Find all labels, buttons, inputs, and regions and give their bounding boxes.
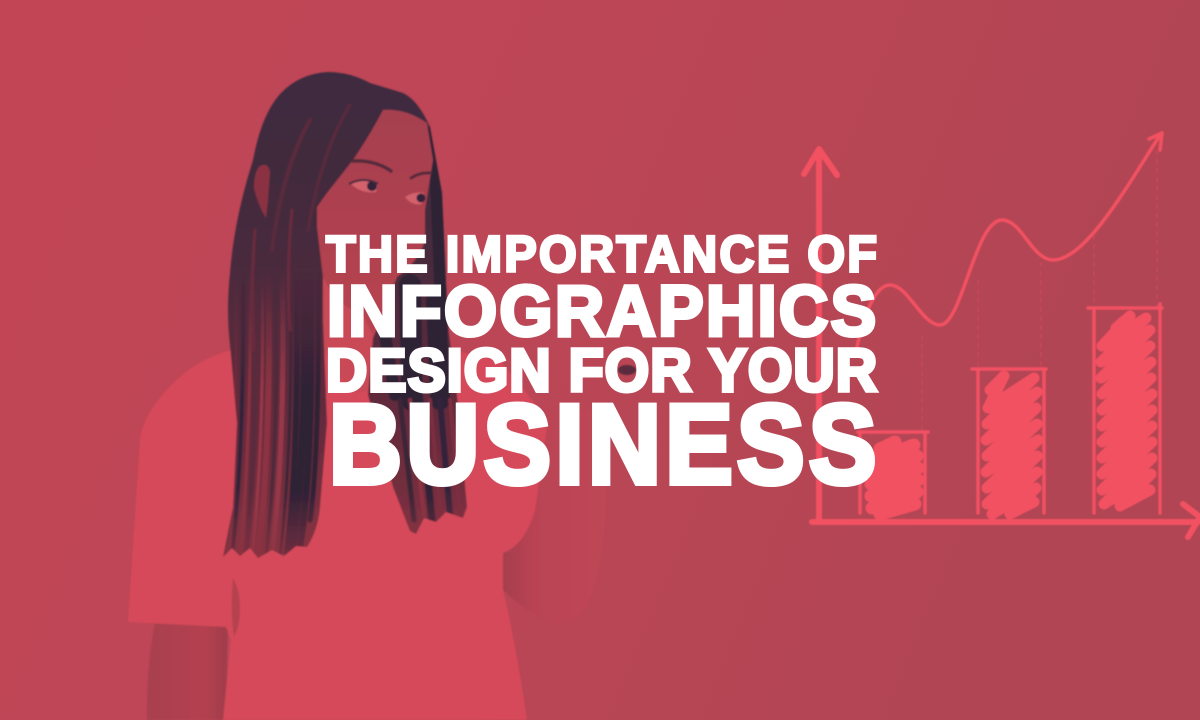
hair base: [215, 65, 475, 565]
eyes: [349, 180, 426, 204]
face: [317, 110, 433, 335]
chart: hand-drawn bars and growth line: [804, 133, 1200, 537]
eyebrows: [353, 161, 431, 178]
growth curve with arrow: [857, 133, 1162, 347]
horizontal axis with arrow: [812, 504, 1200, 537]
scribble bar 2: [986, 376, 1038, 514]
title line 4: BUSINESS: [329, 382, 876, 507]
sleeve crease: [232, 578, 240, 637]
title line 2: INFOGRAPHICS: [327, 271, 876, 351]
right arm: [503, 410, 606, 624]
neck: [320, 262, 420, 392]
title line 3: DESIGN FOR YOUR: [326, 338, 877, 404]
scribble bar 3: [1101, 316, 1152, 506]
scribble bar 1: [871, 442, 918, 514]
hair tip fade: [224, 496, 453, 554]
photo: woman in t-shirt: [128, 65, 636, 720]
hair: [215, 65, 475, 565]
vertical axis with arrow: [804, 149, 837, 522]
dashed guide lines: [922, 150, 1157, 432]
upper and right hair strands: [252, 105, 460, 520]
bar outlines: [858, 304, 1162, 513]
ear: [254, 165, 270, 218]
title: [326, 225, 877, 507]
left hair strands: [230, 284, 321, 554]
left arm: [147, 622, 228, 720]
title line 1: THE IMPORTANCE OF: [326, 225, 877, 283]
hand gap: [618, 365, 636, 375]
t-shirt: [128, 340, 548, 720]
